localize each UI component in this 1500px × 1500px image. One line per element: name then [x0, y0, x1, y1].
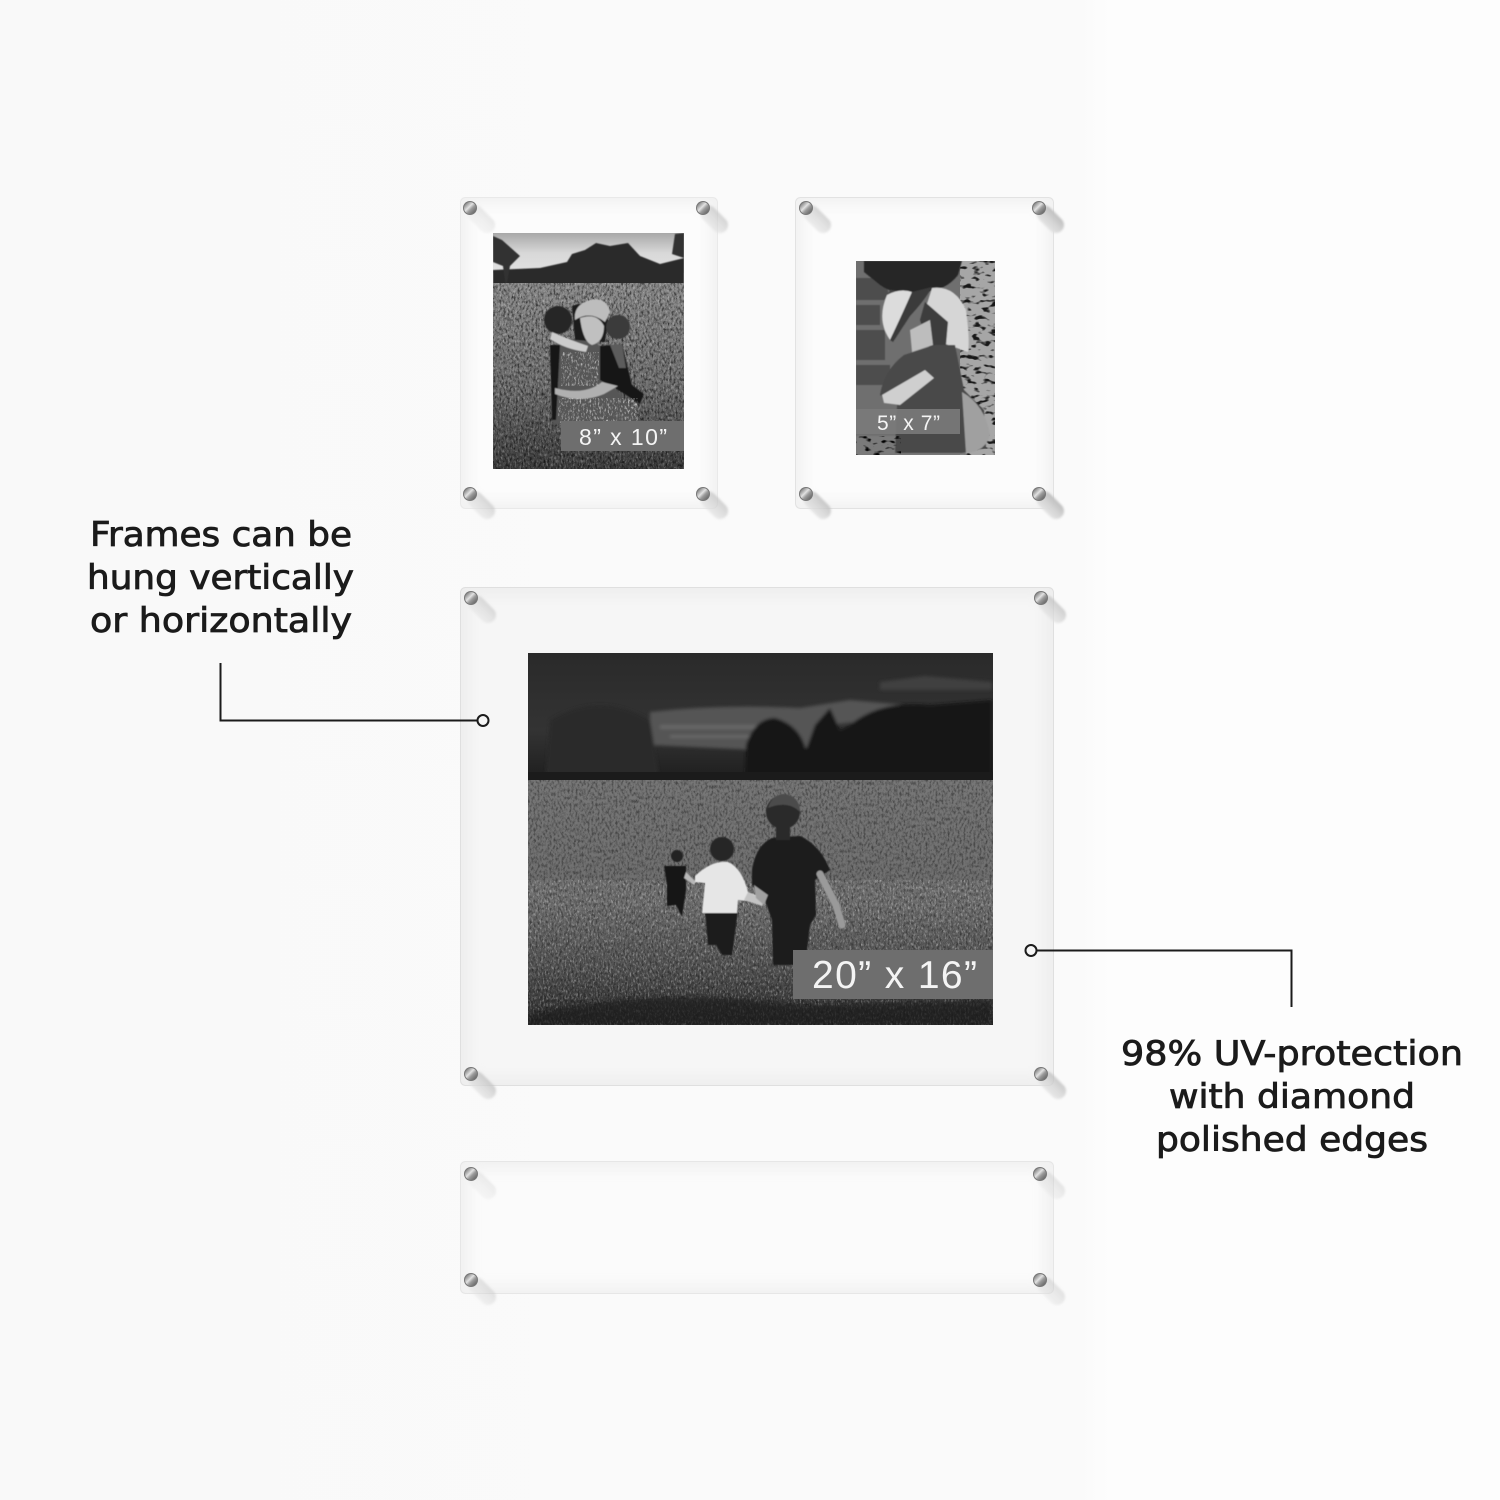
panel: empty horizontal frame — [460, 1161, 1068, 1308]
standoff shadows — [465, 592, 1069, 1102]
acrylic panel — [795, 197, 1054, 509]
panel: frame 5 x 7 — [795, 197, 1067, 522]
standoff shadows — [800, 202, 1067, 522]
acrylic panel — [460, 197, 718, 509]
photo: three children running down a field — [528, 653, 993, 1025]
standoff bolts — [463, 201, 710, 501]
callout text: Frames can be — [90, 515, 352, 554]
callout text: 98% UV-protection — [1121, 1034, 1463, 1073]
acrylic panel — [460, 587, 1054, 1086]
infographic canvas — [90, 197, 1460, 1305]
photo: mother holding child against stone wall — [856, 261, 995, 455]
callout text — [1121, 1034, 1463, 1159]
standoff shadows — [465, 1168, 1068, 1308]
size label 20 x 16: 20” x 16” — [812, 954, 977, 997]
callout text: hung vertically — [87, 558, 354, 597]
acrylic panel — [460, 1161, 1054, 1294]
panel: frame 20 x 16 — [460, 587, 1069, 1102]
standoff shadows — [464, 202, 731, 522]
standoff bolts — [464, 591, 1048, 1081]
standoff bolts — [464, 1167, 1047, 1287]
callout text: with diamond — [1169, 1077, 1415, 1116]
size label 5 x 7: 5” x 7” — [877, 412, 940, 435]
leader line right — [1026, 945, 1292, 1007]
panel: frame 8 x 10 — [460, 197, 731, 522]
size label 5 x 7 — [856, 409, 960, 435]
leader line left — [220, 663, 488, 726]
callout: hanging orientation — [87, 515, 488, 726]
size label 8 x 10: 8” x 10” — [579, 424, 667, 450]
callout text: polished edges — [1156, 1120, 1428, 1159]
callout text — [87, 515, 354, 640]
callout text: or horizontally — [90, 601, 352, 640]
photo: mother hugging two children in a field — [493, 233, 684, 469]
standoff bolts — [799, 201, 1046, 501]
callout: UV protection — [1026, 945, 1463, 1159]
size label 8 x 10 — [561, 421, 684, 451]
